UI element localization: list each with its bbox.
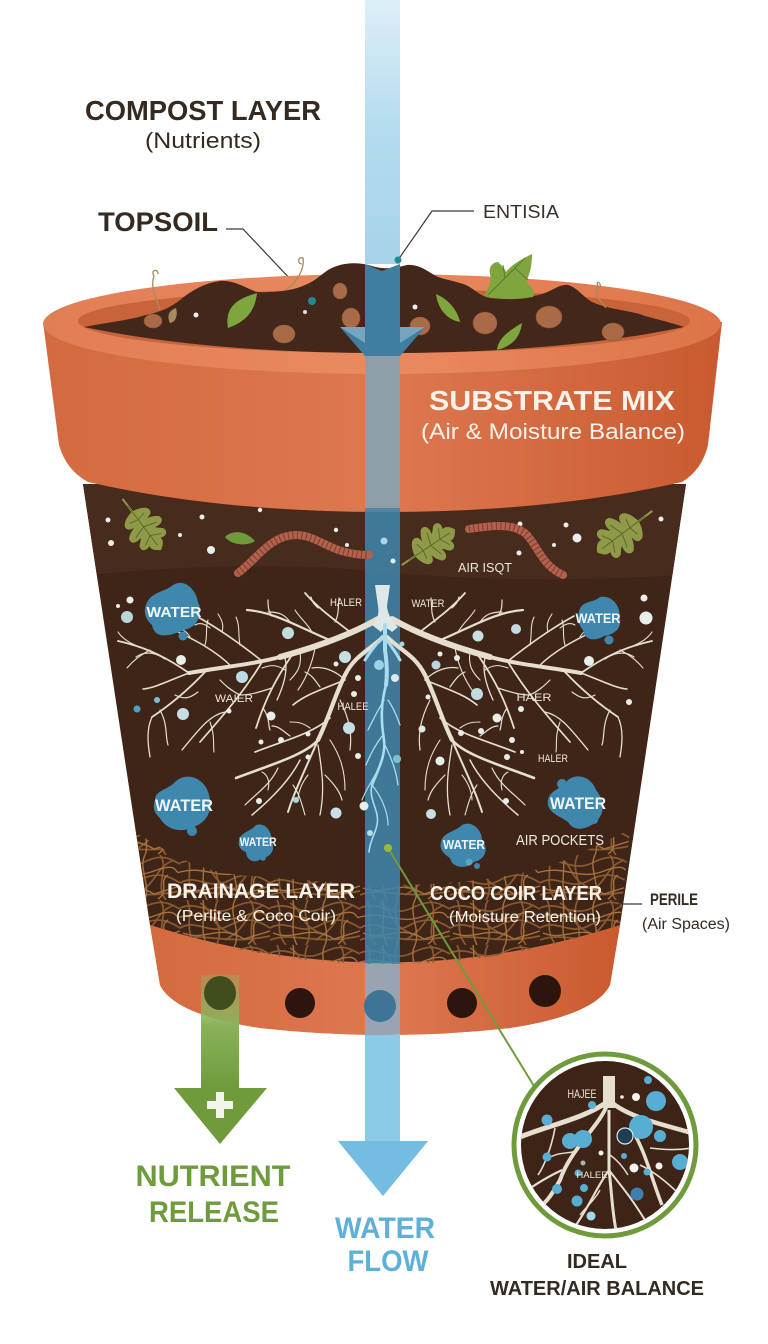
label: entisia with leader	[398, 202, 559, 260]
label: substrate mix	[421, 385, 685, 444]
pocket: lower right: WATER	[550, 794, 606, 813]
pocket: small left	[239, 824, 277, 861]
pocket: lower right	[548, 776, 606, 829]
inset: ideal water air balance	[514, 1054, 696, 1236]
label: entisia with leader: ENTISIA	[483, 202, 559, 222]
leaves	[227, 254, 534, 350]
heading: water flow: WATER	[335, 1212, 435, 1245]
water column above pot	[365, 0, 400, 264]
pocket: small right	[441, 824, 486, 869]
small root and air labels: HALER	[538, 753, 568, 765]
sprouts	[153, 258, 606, 310]
label: drainage layer: DRAINAGE LAYER	[167, 880, 355, 903]
topsoil mound	[84, 254, 684, 353]
pot body	[83, 484, 686, 1035]
pot rim	[43, 274, 722, 512]
title: compost layer: (Nutrients)	[145, 128, 261, 153]
pocket: lower left	[154, 777, 213, 836]
heading: topsoil with leader	[98, 207, 310, 300]
pocket: upper right	[576, 597, 621, 644]
label: substrate mix: SUBSTRATE MIX	[429, 385, 675, 416]
pocket: lower left: WATER	[155, 796, 213, 815]
oak leaves and small leaf	[107, 487, 665, 581]
heading: nutrient release: RELEASE	[149, 1196, 279, 1229]
water column through pot	[338, 264, 428, 1196]
pocket: upper left: WATER	[146, 604, 202, 621]
pocket: small left: WATER	[240, 837, 277, 849]
water pockets	[145, 583, 621, 869]
label: coco coir layer	[430, 883, 603, 926]
pebbles	[144, 283, 624, 343]
inset: ideal water air balance: HALEE	[576, 1170, 608, 1181]
heading: water flow: FLOW	[348, 1245, 429, 1278]
heading: nutrient release	[136, 1160, 290, 1229]
small root and air labels: WATER	[412, 598, 445, 610]
caption: ideal water air balance	[490, 1251, 704, 1300]
label: perlite with leader	[618, 891, 730, 933]
soil interior	[70, 470, 700, 965]
small root and air labels: HAER	[516, 692, 552, 704]
coco fibre layer	[130, 830, 630, 965]
heading: water flow	[335, 1212, 435, 1278]
title: compost layer: COMPOST LAYER	[85, 95, 321, 126]
small root and air labels: HALEE	[338, 701, 368, 713]
small root and air labels: HALER	[330, 597, 362, 609]
label: perlite with leader: PERILE	[650, 891, 698, 909]
air and water dots	[106, 508, 664, 836]
central blue root	[362, 625, 400, 852]
pocket: small right: WATER	[443, 838, 485, 852]
small root and air labels: WAIER	[215, 693, 253, 705]
caption: ideal water air balance: IDEAL	[567, 1251, 627, 1273]
label: substrate mix: (Air & Moisture Balance)	[421, 419, 685, 444]
earthworms	[238, 526, 563, 575]
callout leader to inset	[384, 844, 534, 1086]
drainage holes	[285, 975, 561, 1018]
label: drainage layer	[167, 880, 355, 925]
pocket: upper left	[145, 583, 202, 640]
heading: nutrient release: NUTRIENT	[136, 1160, 290, 1193]
arrow: nutrient release	[174, 975, 267, 1144]
title: compost layer	[85, 95, 321, 153]
pocket: upper right: WATER	[576, 611, 621, 626]
label: perlite with leader: (Air Spaces)	[642, 916, 730, 933]
small root and air labels	[215, 560, 568, 765]
heading: topsoil with leader: TOPSOIL	[98, 207, 218, 237]
small root and air labels: AIR ISQT	[458, 560, 512, 575]
label: drainage layer: (Perlite & Coco Coir)	[176, 908, 336, 925]
label: coco coir layer: COCO COIR LAYER	[430, 883, 603, 905]
caption: ideal water air balance: WATER/AIR BALANCE	[490, 1278, 704, 1300]
pot bottom band	[150, 925, 620, 1035]
inset: ideal water air balance: HAJEE	[568, 1087, 596, 1101]
label: coco coir layer: (Moisture Retention)	[449, 909, 601, 926]
label: air pockets: AIR POCKETS	[516, 833, 604, 849]
roots	[118, 585, 652, 852]
